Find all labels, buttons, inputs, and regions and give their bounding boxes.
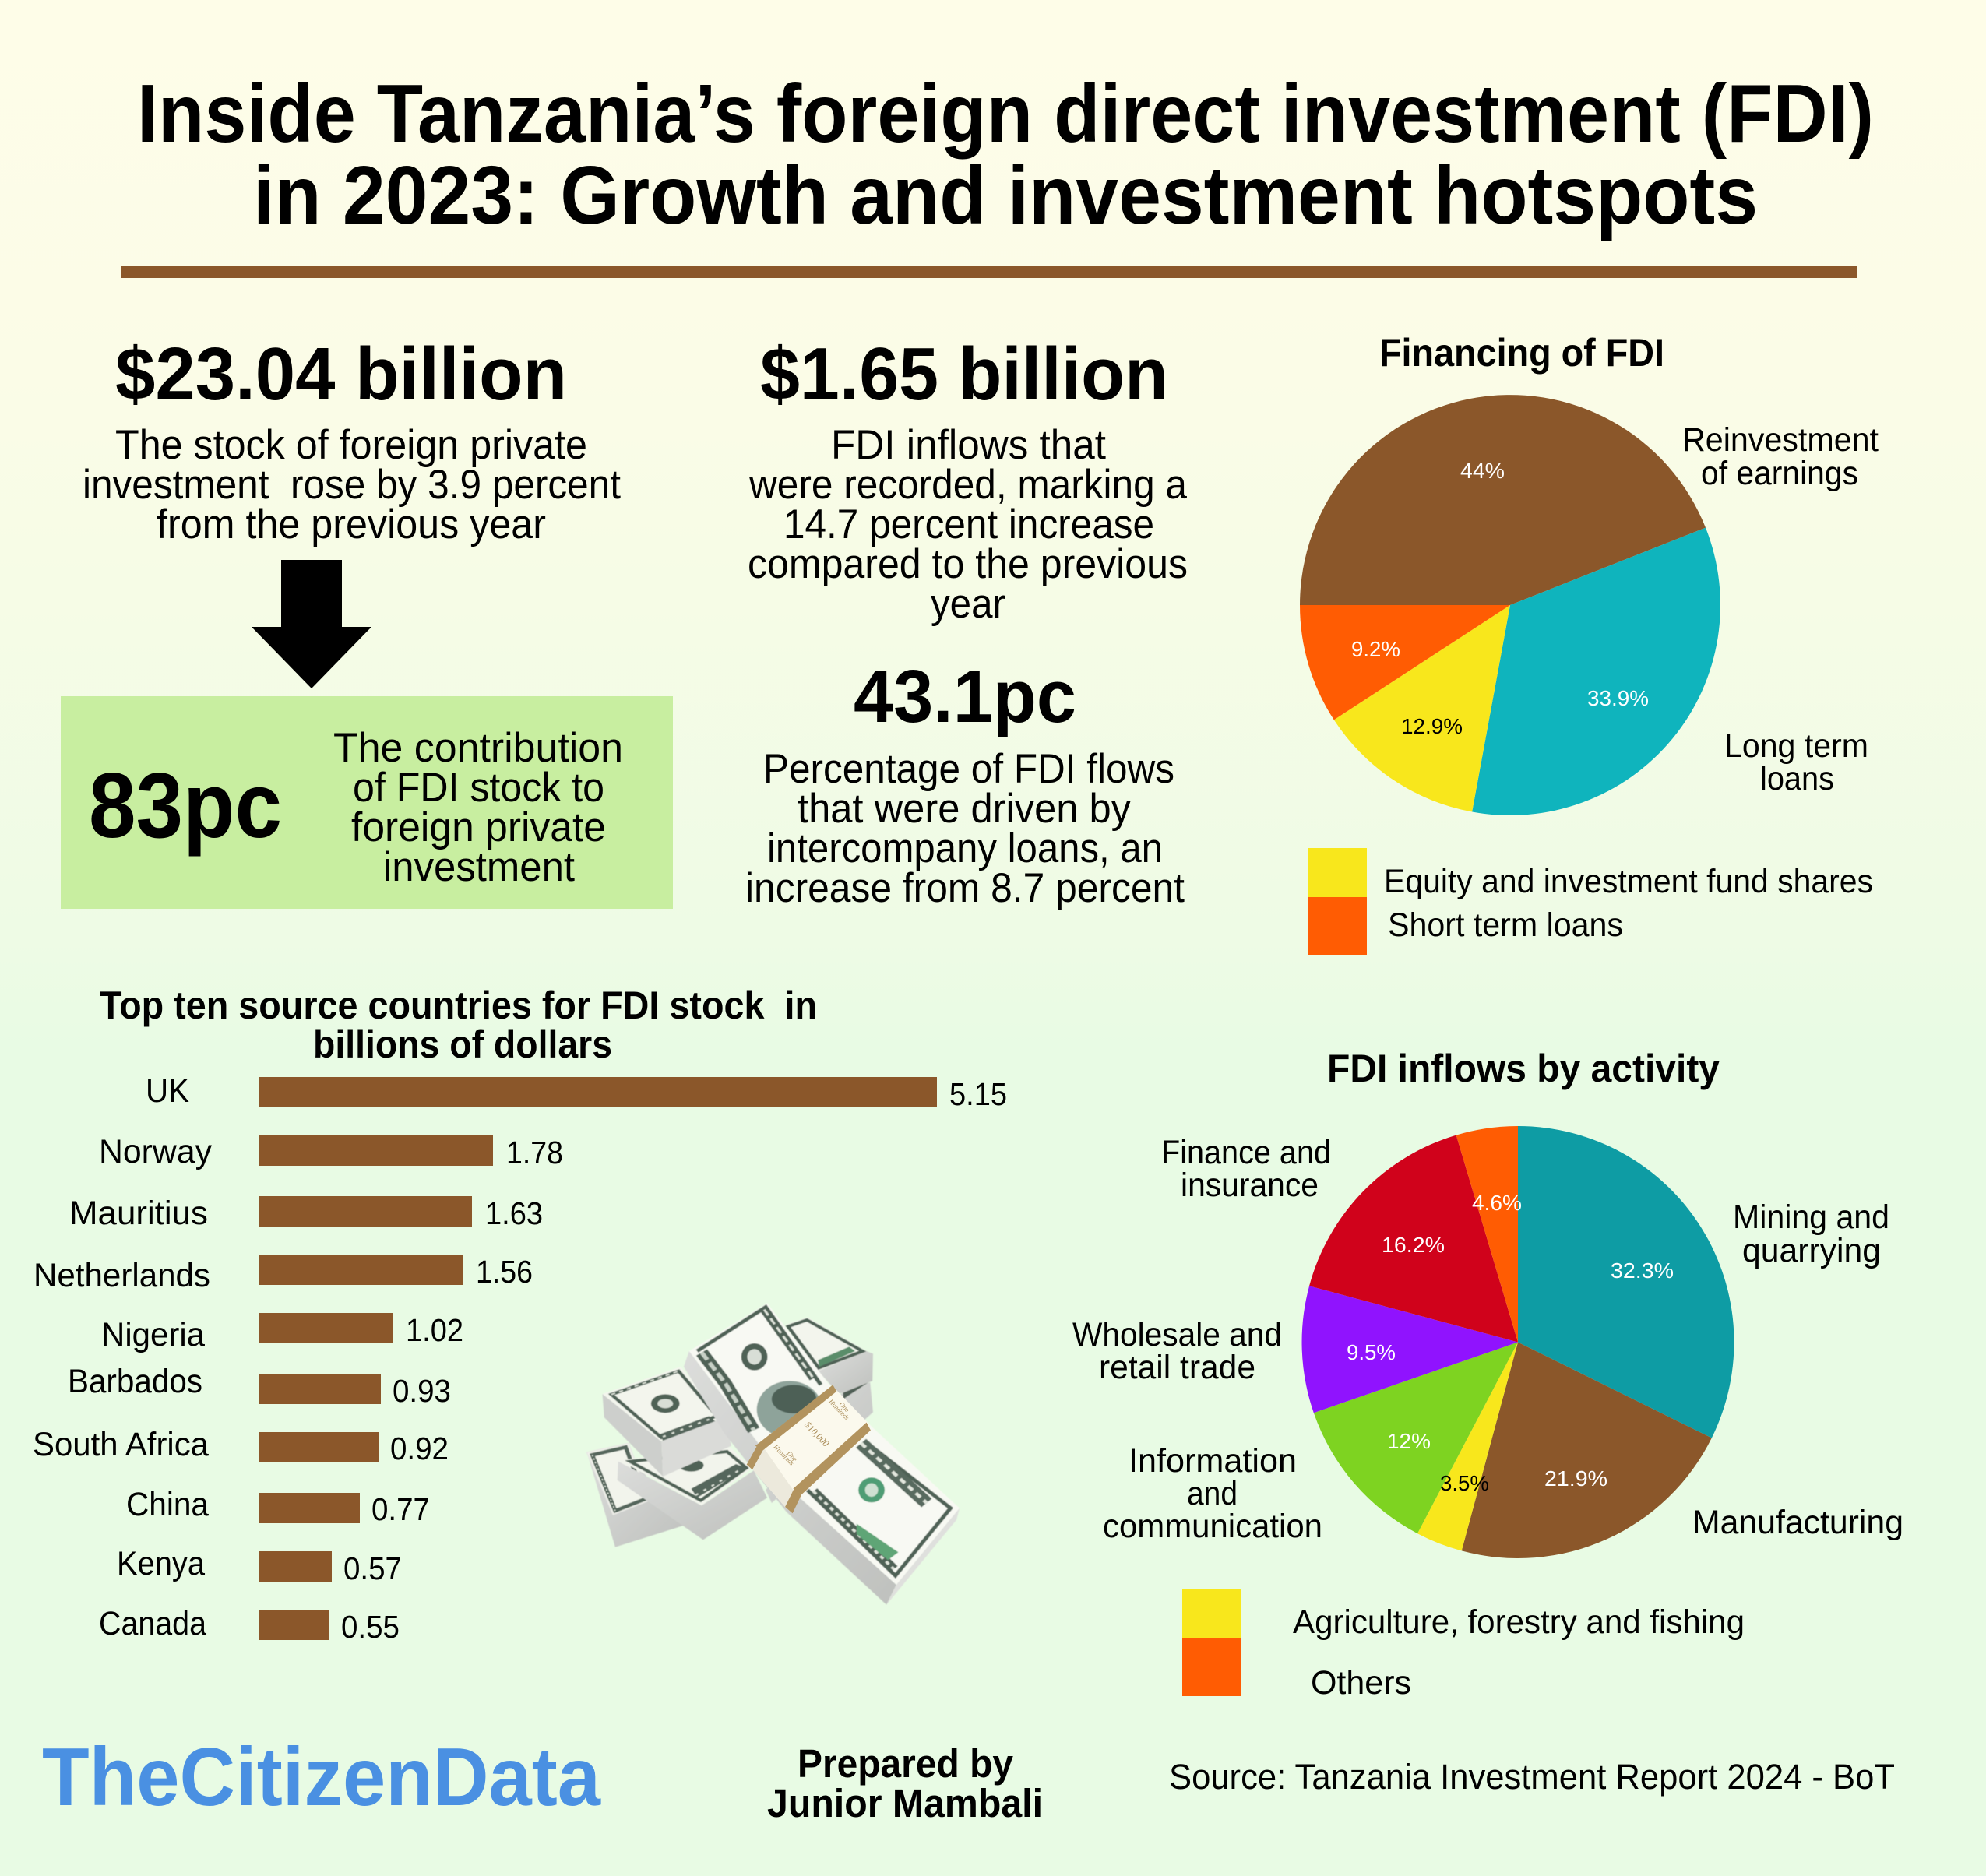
heading: top ten source countries: Top ten source countries for FDI stock in bbox=[100, 984, 817, 1027]
pie chart: FDI inflows by activity: 3.5% bbox=[1440, 1471, 1489, 1495]
bar chart: top ten source countries: Nigeria bbox=[101, 1316, 205, 1353]
pie labels: FDI inflows by activity bbox=[1072, 1134, 1903, 1545]
bar chart: top ten source countries: 1.02 bbox=[406, 1312, 463, 1348]
bar chart: top ten source countries: Barbados bbox=[68, 1363, 202, 1400]
pie labels: financing of FDI bbox=[1682, 421, 1879, 797]
bar chart: top ten source countries: Mauritius bbox=[69, 1195, 208, 1232]
upper left stack bbox=[602, 1394, 663, 1477]
bar chart: top ten source countries: 0.77 bbox=[371, 1491, 430, 1527]
bar chart: top ten source countries: 0.92 bbox=[390, 1431, 449, 1466]
legend: financing of FDI bbox=[1308, 848, 1873, 955]
stat: foreign private investment stock bbox=[83, 333, 621, 547]
stat: FDI inflows: compared to the previous bbox=[748, 541, 1188, 587]
legend: FDI inflows by activity: Others bbox=[1311, 1664, 1411, 1702]
pie chart: FDI inflows by activity bbox=[1302, 1126, 1734, 1558]
pie labels: FDI inflows by activity: and bbox=[1187, 1475, 1238, 1512]
bar chart: top ten source countries: 0.93 bbox=[393, 1373, 451, 1409]
pie chart: FDI inflows by activity: 21.9% bbox=[1544, 1466, 1607, 1491]
pie chart: financing of FDI: 9.2% bbox=[1351, 637, 1400, 661]
pie labels: FDI inflows by activity: Manufacturing bbox=[1692, 1504, 1903, 1541]
stat: intercompany loans: increase from 8.7 percent bbox=[745, 865, 1185, 911]
stat: intercompany loans bbox=[745, 655, 1185, 911]
icon: stacks of dollar bills: Hundreds bbox=[827, 1398, 851, 1421]
bar chart: top ten source countries: Kenya bbox=[117, 1545, 205, 1582]
bar chart: top ten source countries bbox=[33, 1072, 1007, 1645]
stat: foreign private investment stock: The stock of foreign private bbox=[115, 422, 587, 468]
pie labels: FDI inflows by activity: Wholesale and bbox=[1072, 1316, 1282, 1353]
stat: FDI inflows: $1.65 billion bbox=[760, 333, 1168, 416]
panel: 83pc contribution: of FDI stock to bbox=[353, 765, 604, 811]
lower right stack bbox=[766, 1382, 873, 1503]
pie labels: financing of FDI: Reinvestment bbox=[1682, 421, 1879, 459]
bar chart: top ten source countries: 1.63 bbox=[485, 1195, 543, 1231]
heading: top ten source countries bbox=[100, 984, 817, 1066]
heading: FDI inflows by activity: FDI inflows by activity bbox=[1327, 1047, 1720, 1090]
bar chart: top ten source countries: Canada bbox=[99, 1605, 206, 1642]
pie labels: financing of FDI: of earnings bbox=[1701, 455, 1858, 492]
stat: FDI inflows bbox=[748, 333, 1188, 627]
panel: 83pc contribution: 83pc bbox=[89, 754, 282, 857]
title: Inside Tanzania’s foreign direct investment (FDI) bbox=[137, 68, 1874, 160]
title: in 2023: Growth and investment hotspots bbox=[253, 150, 1758, 241]
bar chart: top ten source countries: China bbox=[126, 1486, 209, 1523]
stat: intercompany loans: Percentage of FDI flows bbox=[763, 746, 1174, 792]
icon: stacks of dollar bills bbox=[587, 1303, 960, 1605]
panel: 83pc contribution: foreign private bbox=[351, 804, 606, 850]
bar chart: top ten source countries: Norway bbox=[99, 1133, 212, 1170]
icon: stacks of dollar bills: One bbox=[785, 1450, 799, 1462]
panel: 83pc contribution: The contribution bbox=[333, 725, 623, 771]
pie chart: financing of FDI: 44% bbox=[1460, 459, 1505, 483]
pie chart: FDI inflows by activity: 4.6% bbox=[1472, 1191, 1522, 1215]
legend: FDI inflows by activity: Agriculture, forestry and fishing bbox=[1293, 1603, 1745, 1641]
stat: FDI inflows: FDI inflows that bbox=[831, 422, 1106, 468]
pie labels: financing of FDI: loans bbox=[1760, 760, 1834, 797]
stat: foreign private investment stock: $23.04 billion bbox=[115, 333, 567, 416]
legend: financing of FDI: Equity and investment fund shares bbox=[1384, 863, 1873, 900]
stat: intercompany loans: that were driven by bbox=[798, 786, 1131, 832]
pie labels: FDI inflows by activity: Finance and bbox=[1161, 1134, 1331, 1171]
stat: intercompany loans: 43.1pc bbox=[854, 655, 1076, 738]
arrow: down bbox=[252, 560, 371, 688]
heading: top ten source countries: billions of dollars bbox=[313, 1022, 612, 1066]
bar chart: top ten source countries: Netherlands bbox=[33, 1257, 210, 1294]
pie labels: FDI inflows by activity: retail trade bbox=[1099, 1349, 1255, 1386]
main bundle face bbox=[689, 1303, 960, 1585]
bar chart: top ten source countries: 0.55 bbox=[341, 1609, 400, 1645]
title bbox=[137, 68, 1874, 241]
stat: foreign private investment stock: investment rose by 3.9 percent bbox=[83, 462, 621, 508]
bar chart: top ten source countries: UK bbox=[146, 1072, 189, 1110]
legend: financing of FDI: Short term loans bbox=[1388, 906, 1623, 944]
pie chart: financing of FDI: 33.9% bbox=[1587, 686, 1649, 710]
panel: 83pc contribution: investment bbox=[383, 844, 575, 890]
pie labels: FDI inflows by activity: communication bbox=[1103, 1508, 1322, 1545]
bar chart: top ten source countries: 0.57 bbox=[343, 1550, 402, 1586]
credit: prepared by bbox=[767, 1741, 1043, 1825]
credit: prepared by: Junior Mambali bbox=[767, 1781, 1043, 1825]
pie chart: FDI inflows by activity: 9.5% bbox=[1347, 1340, 1396, 1364]
pie chart: FDI inflows by activity: 16.2% bbox=[1382, 1233, 1445, 1257]
middle stack bbox=[618, 1462, 767, 1540]
stat: intercompany loans: intercompany loans, an bbox=[767, 825, 1163, 871]
bar chart: top ten source countries: 5.15 bbox=[949, 1076, 1007, 1112]
pie chart: FDI inflows by activity: 32.3% bbox=[1611, 1258, 1674, 1283]
pie labels: FDI inflows by activity: quarrying bbox=[1742, 1232, 1881, 1269]
panel: 83pc contribution bbox=[61, 696, 673, 909]
pie chart: FDI inflows by activity: 12% bbox=[1387, 1429, 1431, 1453]
stat: foreign private investment stock: from the previous year bbox=[157, 502, 546, 547]
money band bbox=[759, 1386, 870, 1493]
legend: FDI inflows by activity bbox=[1182, 1589, 1745, 1702]
pie chart: financing of FDI: 12.9% bbox=[1401, 714, 1463, 738]
lowest left stack bbox=[587, 1452, 685, 1547]
source note: Source: Tanzania Investment Report 2024 - BoT bbox=[1169, 1757, 1895, 1797]
pie labels: FDI inflows by activity: Information bbox=[1129, 1442, 1297, 1480]
pie labels: FDI inflows by activity: insurance bbox=[1181, 1167, 1319, 1204]
pie labels: FDI inflows by activity: Mining and bbox=[1733, 1198, 1889, 1236]
stat: FDI inflows: were recorded, marking a bbox=[748, 462, 1187, 508]
bar chart: top ten source countries: 1.56 bbox=[476, 1254, 533, 1290]
icon: stacks of dollar bills: Hundreds bbox=[772, 1444, 797, 1467]
heading: financing of FDI: Financing of FDI bbox=[1379, 331, 1664, 375]
upper right stack bbox=[818, 1351, 873, 1394]
logo: TheCitizenData: TheCitizenData bbox=[42, 1731, 601, 1823]
credit: prepared by: Prepared by bbox=[798, 1741, 1014, 1786]
icon: stacks of dollar bills: One bbox=[837, 1401, 851, 1413]
pie chart: financing of FDI bbox=[1300, 395, 1720, 815]
stat: FDI inflows: year bbox=[931, 581, 1005, 627]
stat: FDI inflows: 14.7 percent increase bbox=[783, 502, 1154, 547]
bar chart: top ten source countries: 1.78 bbox=[506, 1135, 563, 1170]
pie labels: financing of FDI: Long term bbox=[1724, 727, 1868, 765]
main bundle side bbox=[684, 1351, 896, 1605]
bar chart: top ten source countries: South Africa bbox=[33, 1426, 209, 1463]
icon: stacks of dollar bills: $10,000 bbox=[802, 1420, 832, 1448]
